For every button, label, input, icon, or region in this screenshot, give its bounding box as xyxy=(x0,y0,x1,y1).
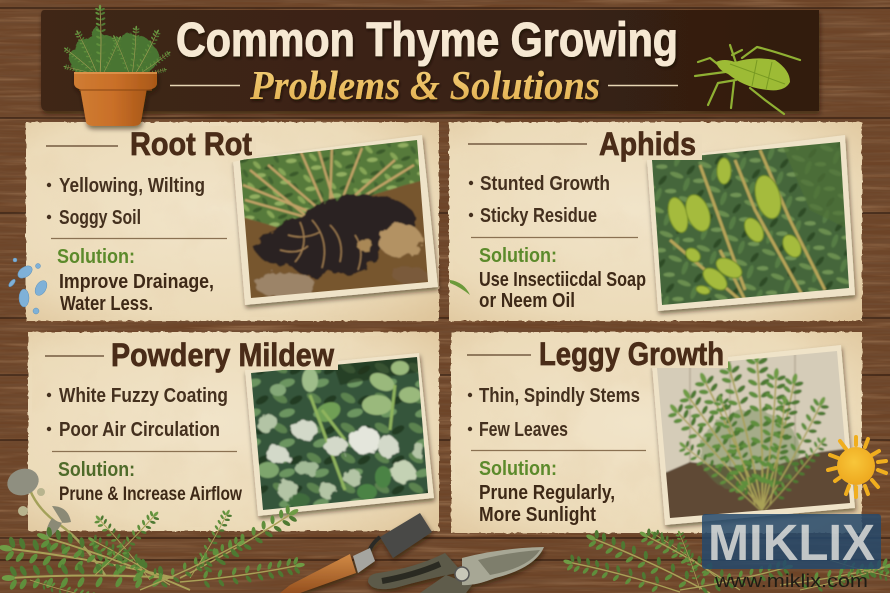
photo: root rot xyxy=(233,135,438,305)
green leaves xyxy=(257,361,421,507)
aphid cluster xyxy=(665,158,805,296)
symptoms xyxy=(47,385,228,441)
panel: aphids xyxy=(449,122,862,321)
panel: powdery mildew xyxy=(28,332,439,531)
symptoms xyxy=(469,173,610,227)
solution: More Sunlight xyxy=(479,504,596,526)
solution: Solution: xyxy=(58,459,135,481)
solution: Prune Regularly, xyxy=(479,482,615,504)
solution xyxy=(57,246,214,315)
website url: www.miklix.com xyxy=(714,571,868,591)
heading notch xyxy=(642,134,702,160)
heading: leggy growth: Leggy Growth xyxy=(539,336,724,372)
solution xyxy=(479,458,615,526)
symptoms: Soggy Soil xyxy=(59,207,141,229)
solution xyxy=(479,245,646,312)
logo: Miklix watermark: MIKLIX xyxy=(708,514,875,571)
symptoms: Poor Air Circulation xyxy=(59,419,220,441)
heading: root rot: Root Rot xyxy=(130,126,252,162)
icon: trowel xyxy=(280,513,432,593)
symptoms: White Fuzzy Coating xyxy=(59,385,228,407)
herb bunch: right xyxy=(561,523,890,593)
solution: Solution: xyxy=(57,246,135,268)
icon: sun xyxy=(828,437,886,497)
heading notch xyxy=(645,345,728,368)
thyme plant xyxy=(668,358,830,510)
panel: leggy growth xyxy=(451,332,862,533)
symptoms: Yellowing, Wilting xyxy=(59,175,205,197)
subtitle: Problems & Solutions xyxy=(249,62,600,108)
icon: potted thyme xyxy=(62,5,173,126)
symptoms xyxy=(468,385,640,441)
solution: Solution: xyxy=(479,458,557,480)
solution xyxy=(58,459,242,505)
mildew patches xyxy=(257,413,424,500)
pot xyxy=(74,72,157,126)
solution: Solution: xyxy=(479,245,557,267)
symptoms: Thin, Spindly Stems xyxy=(479,385,640,407)
symptoms: Sticky Residue xyxy=(480,205,597,227)
solution: Improve Drainage, xyxy=(59,271,214,293)
panel: root rot xyxy=(26,122,439,321)
heading: powdery mildew: Powdery Mildew xyxy=(111,337,334,373)
symptoms xyxy=(47,175,205,229)
symptoms: Stunted Growth xyxy=(480,173,610,195)
solution: Prune & Increase Airflow xyxy=(59,484,242,505)
icon: mildew seed heads xyxy=(4,464,105,575)
icon: aphid xyxy=(695,45,800,114)
photo: powdery mildew xyxy=(245,353,434,516)
heading: aphids: Aphids xyxy=(599,126,696,162)
symptoms: Few Leaves xyxy=(479,419,568,441)
photo: aphids xyxy=(647,135,855,311)
solution: Water Less. xyxy=(60,293,153,315)
solution: Use Insectiicdal Soap xyxy=(479,269,646,291)
photo: leggy growth xyxy=(652,345,855,525)
solution: or Neem Oil xyxy=(479,290,575,312)
header plank xyxy=(41,10,819,111)
icon: leaf tip xyxy=(450,280,470,295)
title: Common Thyme Growing xyxy=(176,14,678,67)
foliage xyxy=(62,5,173,79)
heading notch xyxy=(240,345,338,370)
icon: water drops xyxy=(8,258,49,314)
heading notch xyxy=(228,132,256,163)
icon: pruning shears xyxy=(368,547,544,593)
herb bunch: left xyxy=(0,501,306,593)
